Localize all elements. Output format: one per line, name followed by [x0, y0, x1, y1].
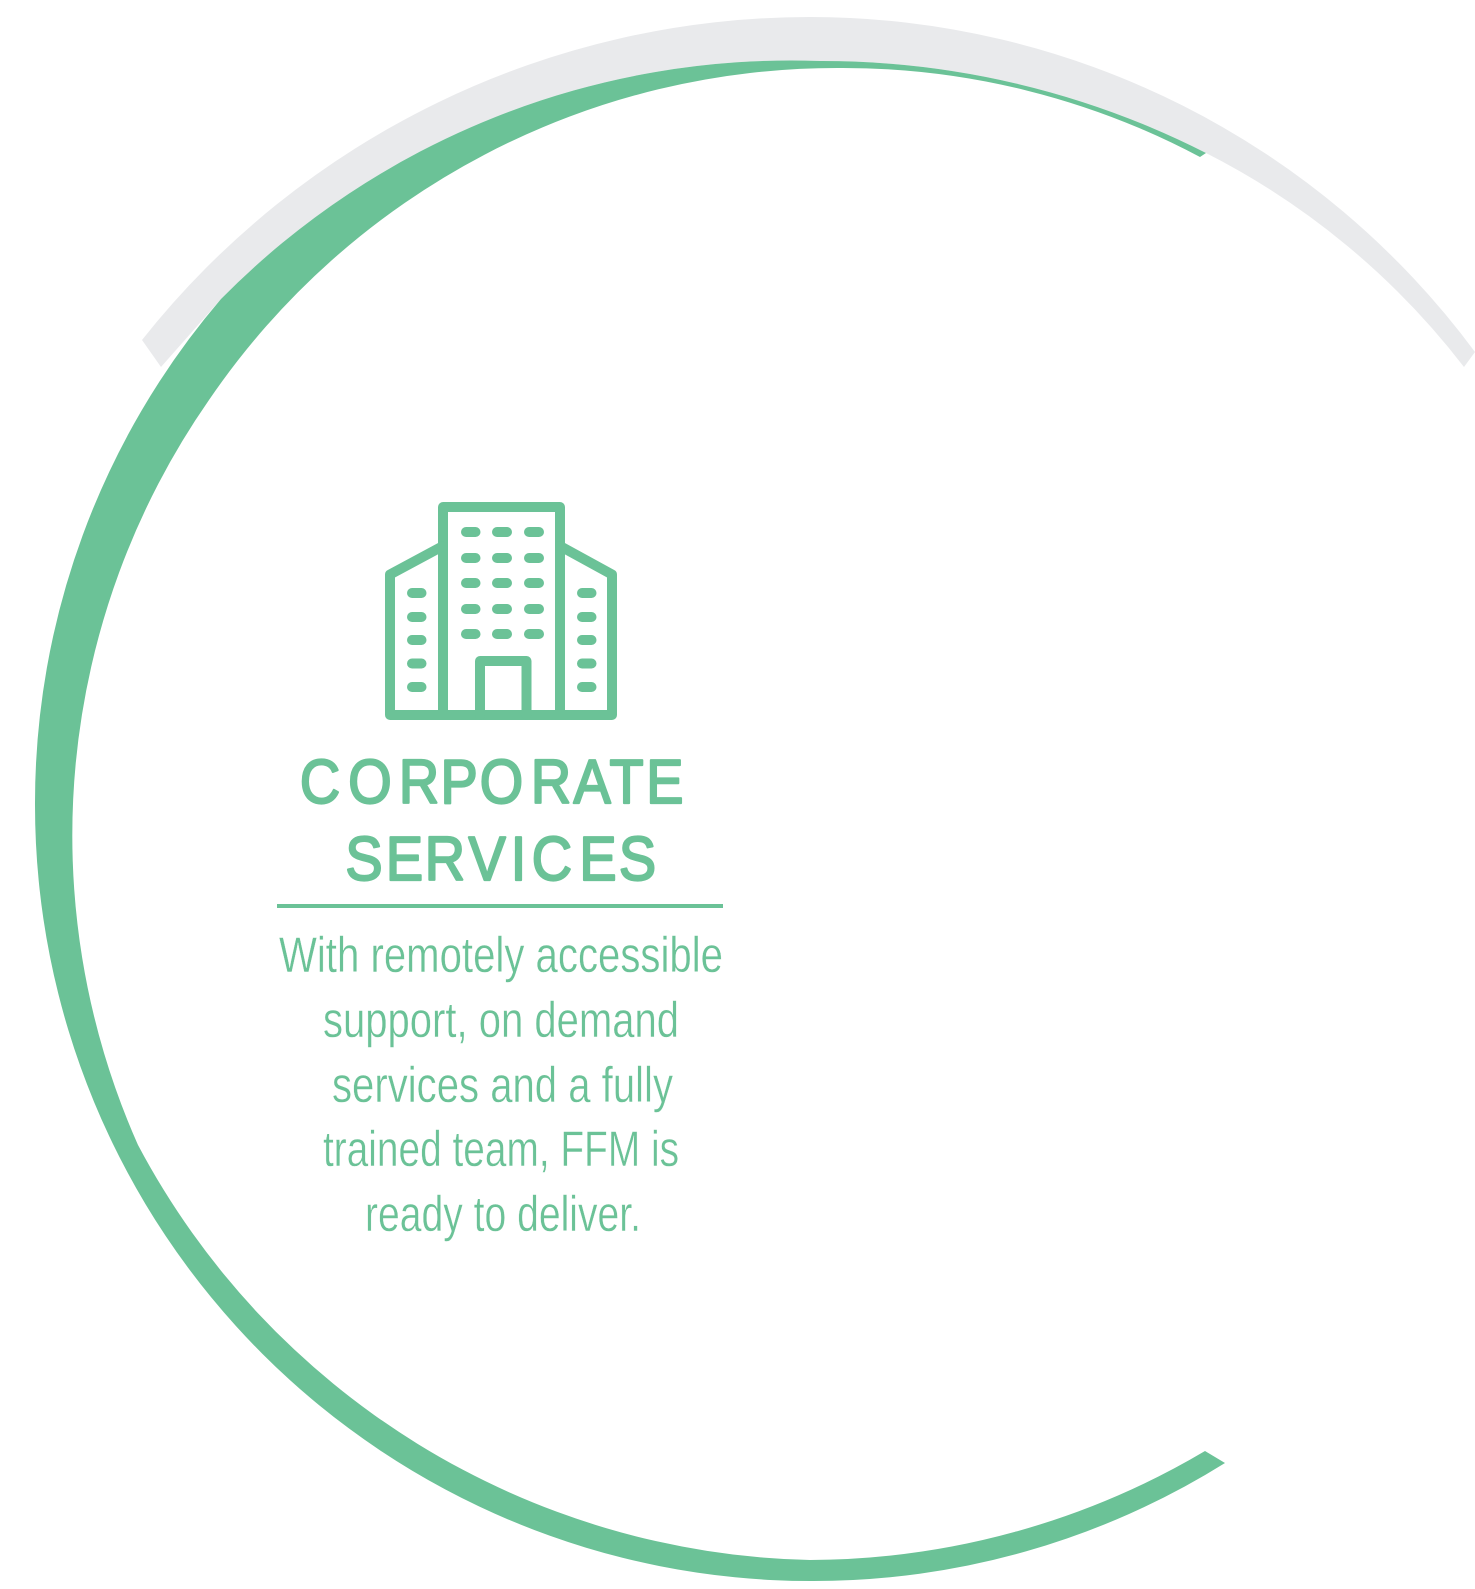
- icon: office buildings: [390, 507, 612, 715]
- description text: services and a fully: [332, 1057, 673, 1113]
- heading: corporate services: SERVICES: [345, 825, 656, 894]
- description text: [279, 927, 723, 1242]
- icon: central windows: [461, 527, 544, 639]
- description text: trained team, FFM is: [323, 1121, 679, 1177]
- icon: door: [480, 661, 526, 715]
- icon: central tower: [443, 507, 560, 715]
- heading: corporate services: CORPORATE: [300, 748, 683, 817]
- heading underline: [277, 904, 723, 908]
- icon: side windows: [407, 588, 596, 692]
- description text: ready to deliver.: [365, 1186, 641, 1242]
- heading: corporate services: [300, 748, 683, 894]
- grey background arc: [142, 17, 1475, 367]
- description text: support, on demand: [323, 992, 679, 1048]
- description text: With remotely accessible: [279, 927, 723, 983]
- icon: side wings and base: [390, 546, 612, 715]
- green crescent ring: [35, 60, 1225, 1581]
